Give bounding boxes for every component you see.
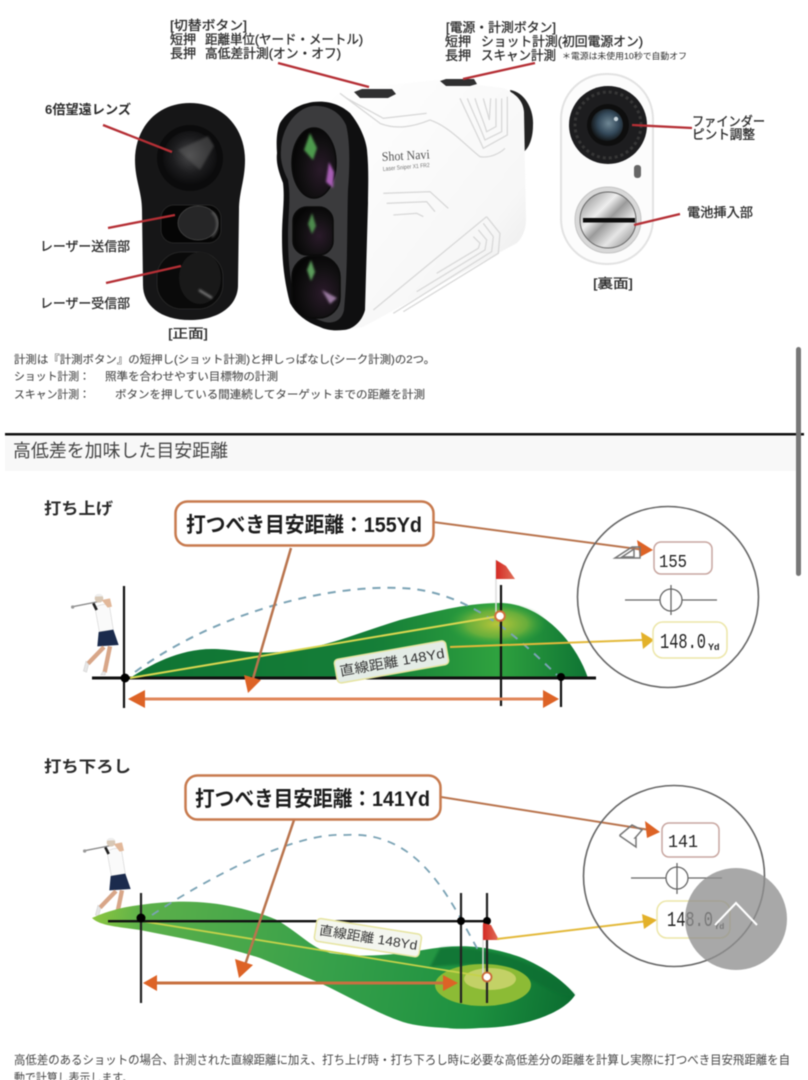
callout: target distance xyxy=(186,776,440,820)
label: front: [正面] xyxy=(168,326,208,341)
label: power and measure button: [電源・計測ボタン] xyxy=(446,20,556,35)
display: target xyxy=(654,542,712,574)
label: telephoto lens: 6倍望遠レンズ xyxy=(45,102,131,117)
distance arrow xyxy=(143,975,458,991)
callout: target distance: 打つべき目安距離：141Yd xyxy=(195,788,430,811)
label: power and measure button xyxy=(445,20,687,63)
label: power and measure button: ショット計測(初回電源オン) xyxy=(481,34,643,49)
panel: uphill shot diagram xyxy=(44,499,758,708)
heading: uphill: 打ち上げ xyxy=(44,499,113,518)
display: straight: 148.0 xyxy=(667,910,713,933)
heading: downhill: 打ち下ろし xyxy=(44,757,131,776)
label: straight distance xyxy=(334,640,449,684)
model name: Laser Sniper X1 FR2 xyxy=(383,163,431,173)
label: laser transmitter: レーザー送信部 xyxy=(40,239,130,254)
button: power and measure xyxy=(440,79,477,86)
centre unit body xyxy=(277,79,533,331)
label: battery slot: 電池挿入部 xyxy=(687,205,753,220)
back view unit xyxy=(561,74,653,264)
fairway shadow xyxy=(430,947,575,996)
callout: target distance xyxy=(176,502,434,546)
display: target xyxy=(662,823,719,857)
text block: measurement modes: 計測は『計測ボタン』の短押し(ショット計測)と押しっぱなし(シーク計測)の2つ。 xyxy=(14,352,435,366)
label: switch button: 長押 xyxy=(170,46,196,61)
golfer xyxy=(83,838,131,919)
flight path xyxy=(135,588,557,675)
front view unit xyxy=(135,103,245,320)
label: laser receiver: レーザー受信部 xyxy=(40,296,130,311)
housing xyxy=(277,102,368,330)
label: switch button: [切替ボタン] xyxy=(170,18,247,33)
panel: parts diagram xyxy=(40,18,765,341)
label: straight distance: 直線距離 148Yd xyxy=(318,923,418,953)
text block: measurement modes: 照準を合わせやすい目標物の計測 xyxy=(105,369,278,383)
label: power and measure button: スキャン計測 xyxy=(481,48,556,63)
arrow: straight distance to display xyxy=(450,632,654,649)
flight path xyxy=(152,835,478,950)
label: power and measure button: ＊電源は未使用10秒で自動オフ xyxy=(562,51,687,61)
brand logo: Shot Navi xyxy=(381,146,430,164)
callout: target distance: 打つべき目安距離：155Yd xyxy=(186,514,422,537)
text block: measurement modes xyxy=(14,352,435,401)
arrow: callout to display xyxy=(433,522,653,557)
label: power and measure button: 長押 xyxy=(445,48,471,63)
flag xyxy=(496,560,515,616)
label: switch button: 距離単位(ヤード・メートル) xyxy=(205,32,363,47)
putting green xyxy=(435,964,531,1006)
section heading band xyxy=(5,433,804,471)
crosshair xyxy=(631,863,722,894)
label: switch button: 短押 xyxy=(170,32,196,47)
arrow: callout to carry xyxy=(235,820,294,978)
label: straight distance: 直線距離 148Yd xyxy=(339,646,446,679)
display: straight xyxy=(653,622,727,658)
distance arrow xyxy=(128,690,559,708)
display: straight: Yd xyxy=(708,642,720,652)
text block: measurement modes: スキャン計測： xyxy=(14,387,90,401)
scrollbar xyxy=(796,347,801,576)
heading: 高低差を加味した目安距離 xyxy=(13,441,228,461)
scope view xyxy=(584,786,764,966)
flag xyxy=(483,923,499,975)
straight line xyxy=(141,921,487,977)
arrow: callout to carry xyxy=(244,548,291,693)
scope view xyxy=(578,506,758,688)
text block: measurement modes: ショット計測： xyxy=(14,369,90,383)
display: straight: 148.0 xyxy=(660,632,706,655)
green hill xyxy=(130,603,588,678)
putting green xyxy=(447,602,547,646)
label: finder focus: ファインダー xyxy=(692,114,765,129)
display: target: 155 xyxy=(659,553,687,573)
verticals xyxy=(141,893,487,1003)
display: straight: Yd xyxy=(714,922,724,931)
button: mode switch xyxy=(354,89,396,98)
panel: downhill shot diagram xyxy=(44,757,764,1029)
text block: measurement modes: ボタンを押している間連続してターゲットまでの距離を計測 xyxy=(115,387,425,401)
text block: footnote: 高低差のあるショットの場合、計測された直線距離に加え、打ち上げ時・打ち下ろし時に必要な高低差分の距離を計算し実際に打つべき目安飛距離を自 xyxy=(14,1052,790,1067)
label: straight distance xyxy=(314,918,422,957)
arrow: straight distance to display xyxy=(497,914,657,939)
display: target: 141 xyxy=(668,833,698,853)
red leader lines xyxy=(103,63,692,283)
decline icon xyxy=(620,825,642,847)
label: power and measure button: 短押 xyxy=(445,34,471,49)
label: finder focus: ピント調整 xyxy=(692,127,755,142)
text block: footnote xyxy=(14,1052,790,1080)
label: switch button: 高低差計測(オン・オフ) xyxy=(205,46,341,61)
label: finder focus xyxy=(692,114,765,142)
scroll to top button xyxy=(685,868,787,970)
label: back: [裏面] xyxy=(593,276,633,291)
ground line xyxy=(92,676,596,680)
label: switch button xyxy=(170,18,363,61)
golfer xyxy=(71,594,119,675)
horizontal line xyxy=(108,920,488,922)
verticals xyxy=(124,585,561,708)
display: straight xyxy=(657,901,730,938)
crosshair xyxy=(625,585,717,615)
green fairway xyxy=(92,902,575,1029)
arrow: callout to display xyxy=(441,797,660,838)
straight line xyxy=(130,616,500,678)
incline icon xyxy=(615,547,640,558)
